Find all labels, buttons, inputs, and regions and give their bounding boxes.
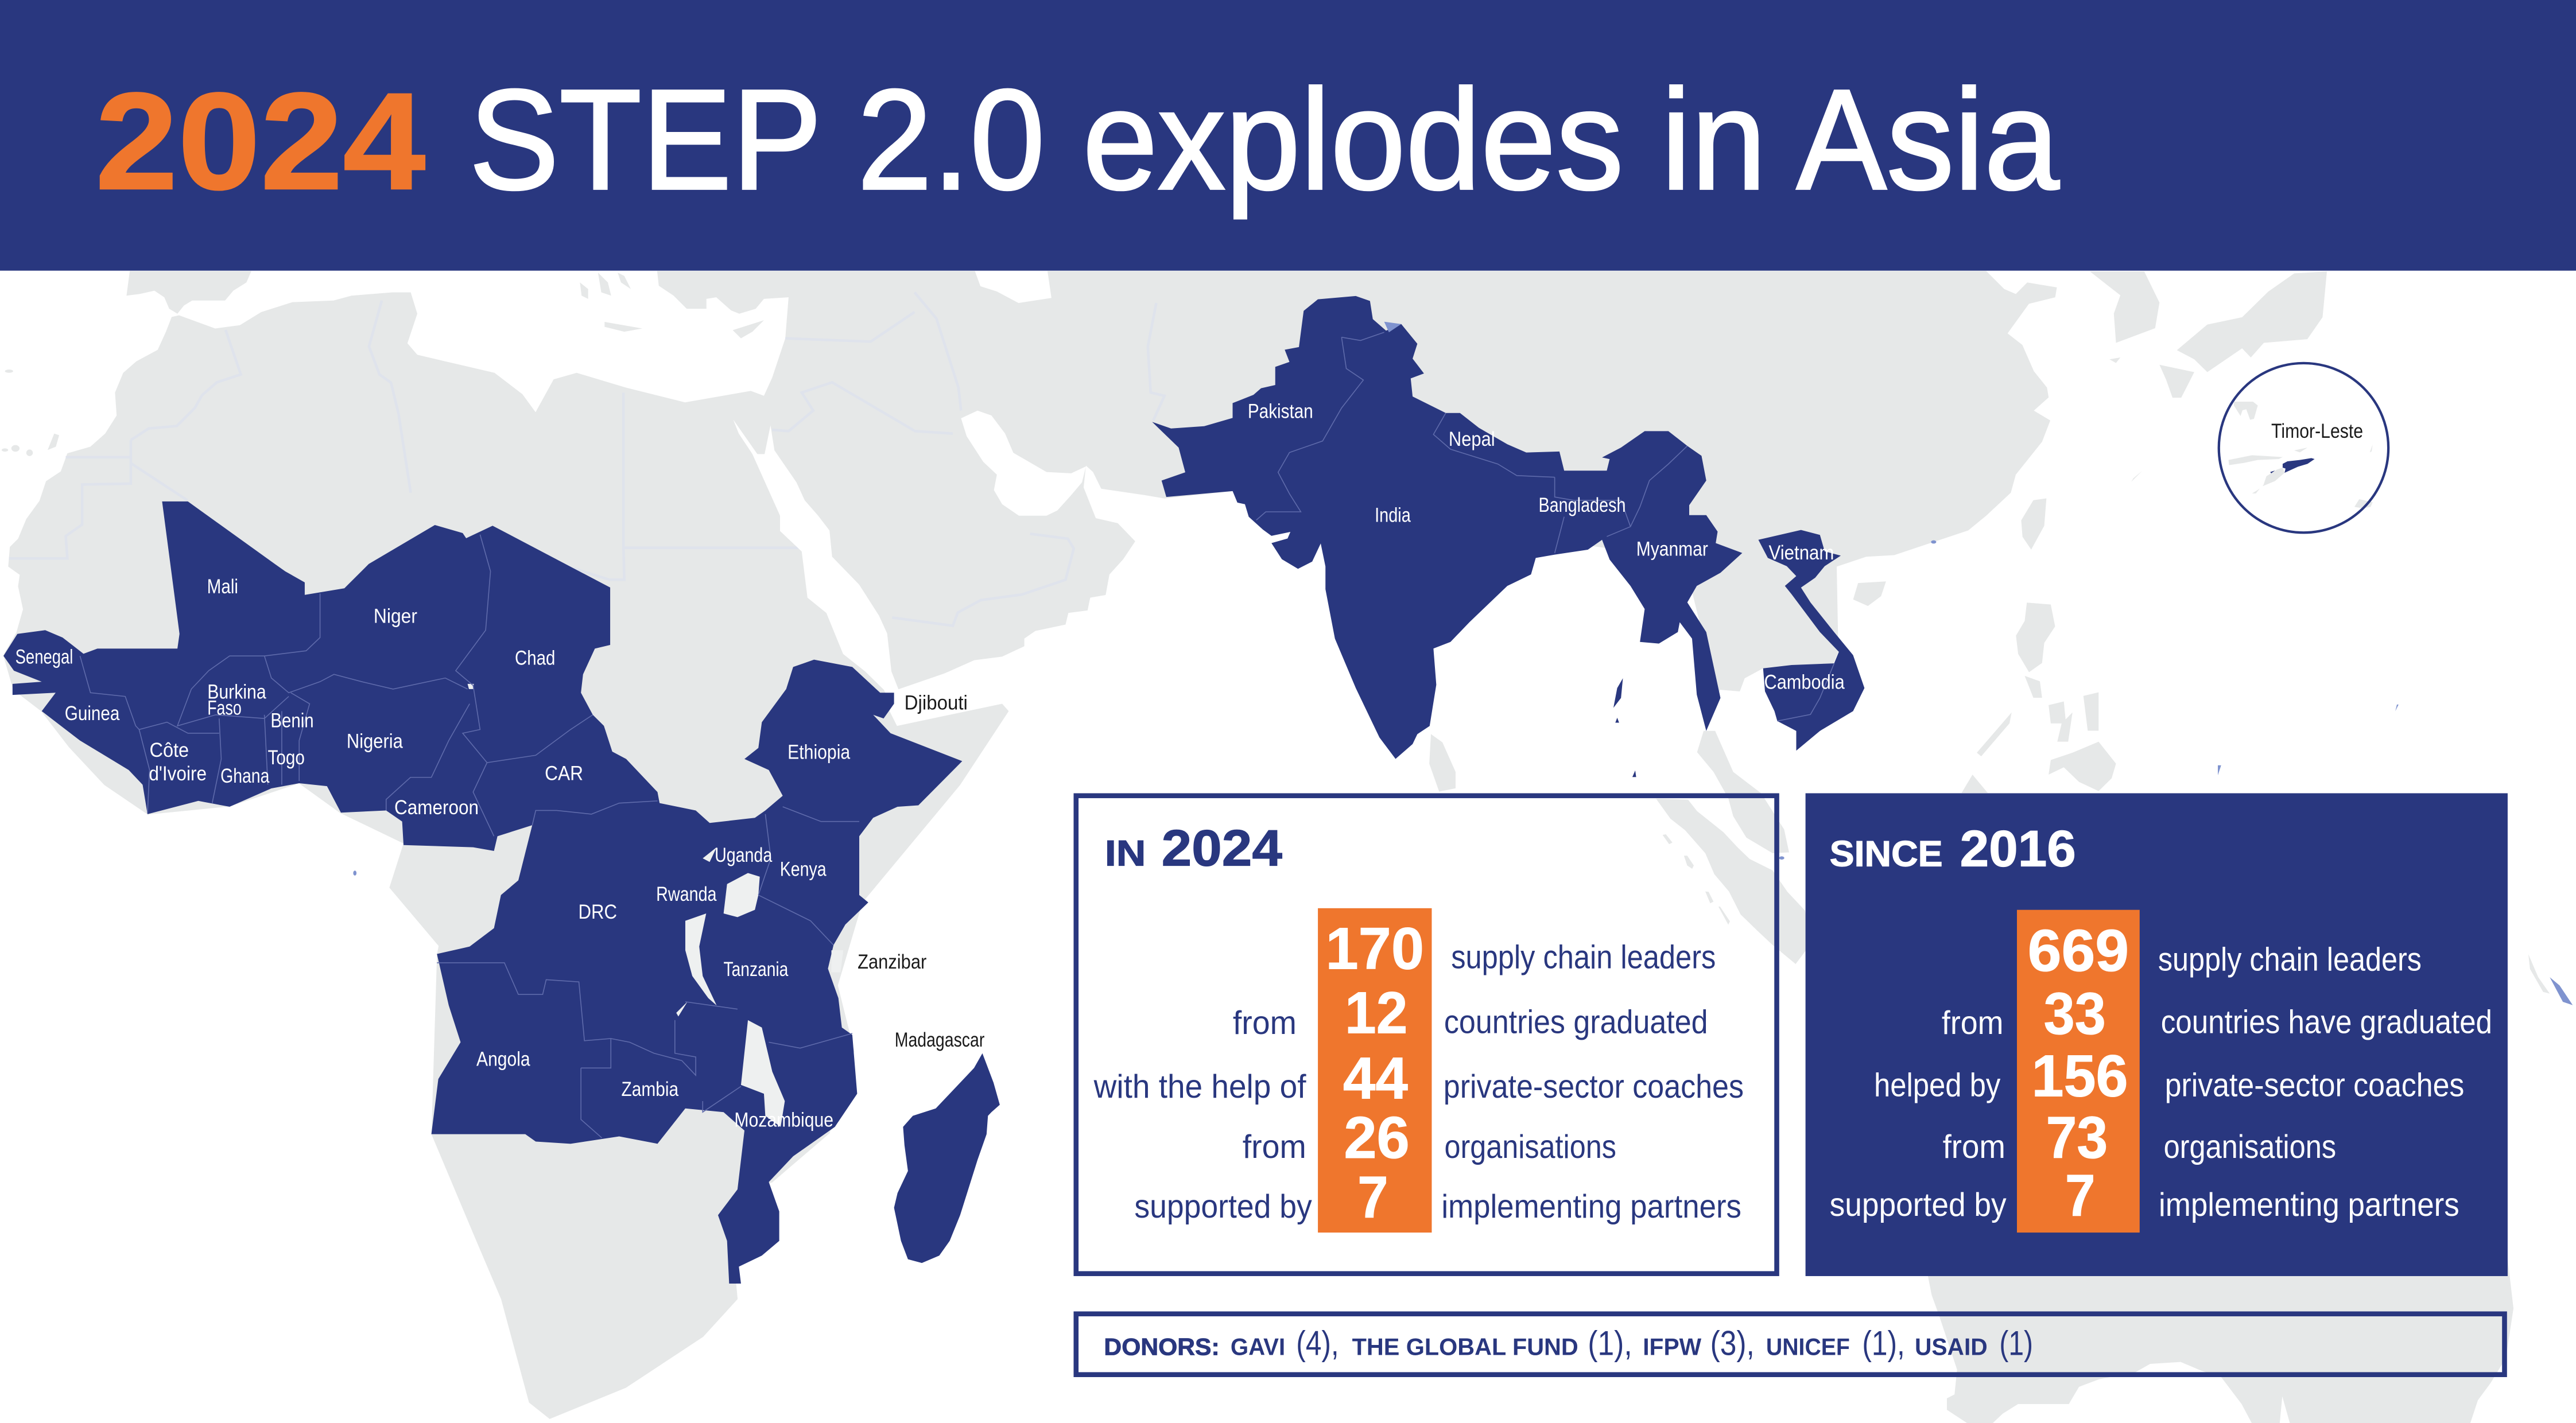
country labels: Nigeria [347, 730, 403, 752]
country labels: Angola [476, 1048, 530, 1071]
country labels: Cambodia [1764, 671, 1845, 693]
disputed territory patch [1384, 322, 1401, 332]
heading: since 2016 [1830, 821, 2076, 877]
African lakes [468, 684, 843, 1127]
heading: in 2024 [1105, 819, 1282, 876]
stat rows: countries have graduated [2161, 1004, 2492, 1040]
country labels: Mali [207, 576, 238, 598]
donors text: (1), [1588, 1324, 1632, 1362]
country labels: Pakistan [1248, 400, 1313, 422]
stat rows: supported by [1134, 1188, 1312, 1225]
country labels: Djibouti [905, 691, 968, 714]
land: Spain [126, 271, 251, 314]
heading: in 2024: 2024 [1162, 819, 1282, 876]
country labels: Côte [149, 739, 189, 761]
country labels: Zanzibar [858, 951, 927, 973]
country labels: Ethiopia [787, 741, 851, 764]
donors bar [1076, 1314, 2504, 1375]
land: East Asian islands [1962, 271, 2327, 793]
sea: Red Sea [733, 419, 899, 709]
heading: since 2016: SINCE [1830, 834, 1943, 874]
country labels: Togo [268, 747, 305, 769]
orange number column [1318, 908, 1431, 1233]
stat rows: 44 [1343, 1045, 1408, 1111]
country labels: CAR [545, 763, 583, 785]
donors text: (1) [1999, 1324, 2033, 1362]
country labels: Uganda [715, 844, 773, 866]
heading: since 2016: 2016 [1960, 821, 2076, 877]
stat rows: supply chain leaders [2158, 941, 2422, 978]
stat rows: implementing partners [2159, 1187, 2459, 1223]
country labels: Mozambique [734, 1109, 833, 1132]
small blue territories [353, 541, 2573, 1005]
country labels: Ghana [220, 765, 270, 787]
land: Sri Lanka [1429, 734, 1456, 792]
inset circle [2219, 363, 2388, 532]
South and South-East Asia highlighted countries [1152, 296, 1864, 777]
sea: Caspian [975, 271, 1052, 303]
country labels: Madagascar [895, 1029, 985, 1051]
country labels: Bangladesh [1538, 494, 1625, 516]
stat rows: implementing partners [1441, 1188, 1741, 1225]
stat rows: from [1243, 1129, 1306, 1165]
land: small islands right edge [2528, 954, 2550, 994]
stat rows: 73 [2046, 1105, 2108, 1171]
sea: Persian Gulf [961, 411, 1086, 516]
country labels: Chad [515, 647, 555, 670]
country borders Africa [80, 535, 859, 1138]
Africa highlighted countries [3, 501, 1000, 1284]
country labels: Senegal [15, 646, 73, 668]
stat rows [1093, 916, 1744, 1230]
donors text: GAVI [1231, 1333, 1285, 1360]
country labels: DRC [579, 901, 617, 923]
land: Mediterranean islands [2, 273, 764, 456]
panel: in 2024 [1076, 796, 1777, 1274]
Andaman and Nicobar islands [1613, 678, 1636, 777]
country labels: Myanmar [1636, 538, 1708, 560]
stat rows: from [1942, 1005, 2004, 1041]
Timor-Leste shape [2270, 458, 2315, 473]
stat rows: organisations [1444, 1129, 1616, 1165]
country labels: Burkina [207, 681, 266, 703]
country labels: Guinea [65, 702, 120, 725]
Lake Victoria [724, 873, 760, 917]
stat rows: organisations [2164, 1129, 2336, 1165]
stat rows: 156 [2031, 1043, 2128, 1109]
title: STEP 2.0 explodes in Asia [469, 60, 2059, 219]
donors text: THE GLOBAL FUND [1352, 1333, 1578, 1360]
stat rows: helped by [1874, 1067, 2001, 1103]
stat rows: 669 [2028, 917, 2129, 983]
stat rows: 170 [1326, 916, 1424, 982]
land: islands inside Timor circle [2229, 402, 2373, 508]
Timor-Leste inset [2219, 363, 2388, 532]
Madagascar [894, 1053, 1000, 1263]
Africa country landmass [3, 501, 962, 1284]
country labels [15, 400, 2363, 1132]
country borders Asia [1256, 332, 1834, 721]
land: islands west of Sumatra [1663, 834, 1730, 924]
country labels: Timor-Leste [2271, 420, 2363, 442]
country labels: Tanzania [724, 958, 789, 981]
stat rows [1830, 917, 2492, 1228]
stat rows: 26 [1344, 1105, 1410, 1171]
Vietnam and Cambodia [1758, 530, 1864, 751]
stat rows: countries graduated [1444, 1004, 1708, 1040]
stat rows: 12 [1345, 979, 1407, 1045]
stat rows: from [1943, 1129, 2005, 1165]
country labels: Niger [374, 605, 417, 627]
donors text: DONORS: [1104, 1333, 1220, 1360]
donors text: (4), [1296, 1324, 1339, 1362]
heading: in 2024: IN [1105, 833, 1146, 873]
country labels: Benin [270, 710, 314, 732]
country labels: Vietnam [1768, 542, 1834, 564]
stat rows: 7 [2065, 1162, 2096, 1228]
donors text: (3), [1710, 1324, 1755, 1362]
land: Sumatra [1656, 799, 1810, 964]
land: Malay peninsula [1697, 731, 1789, 853]
land: Australia region [1922, 1243, 2513, 1423]
donors text [1104, 1324, 2033, 1362]
stat rows: private-sector coaches [2165, 1067, 2464, 1103]
country labels: Rwanda [656, 883, 717, 905]
header band [0, 0, 2576, 271]
country labels: Zambia [622, 1078, 679, 1101]
country labels: d'Ivoire [149, 763, 207, 785]
stat rows: supported by [1830, 1187, 2007, 1223]
title: 2024 [95, 64, 425, 218]
donors text: UNICEF [1766, 1333, 1850, 1360]
stat rows: with the help of [1093, 1068, 1306, 1105]
land: Africa and Eurasia [3, 271, 2057, 1419]
stat rows: from [1233, 1005, 1297, 1041]
panel: since 2016 [1806, 793, 2508, 1276]
faint country borders [9, 292, 1165, 626]
country labels: India [1375, 504, 1411, 526]
stat rows: supply chain leaders [1451, 939, 1716, 976]
South Asia landmass [1152, 296, 1742, 759]
stat rows: 7 [1357, 1164, 1388, 1230]
country labels: Cameroon [394, 796, 479, 819]
country labels: Nepal [1449, 428, 1495, 450]
stat rows: private-sector coaches [1444, 1068, 1744, 1105]
country labels: Faso [207, 697, 242, 720]
stat rows: 33 [2044, 981, 2106, 1047]
donors text: IFPW [1643, 1333, 1702, 1360]
country labels: Kenya [780, 858, 827, 881]
land: Hainan [1853, 581, 1886, 606]
donors text: USAID [1915, 1333, 1988, 1360]
donors text: (1), [1862, 1324, 1905, 1362]
orange number column [2017, 910, 2140, 1233]
